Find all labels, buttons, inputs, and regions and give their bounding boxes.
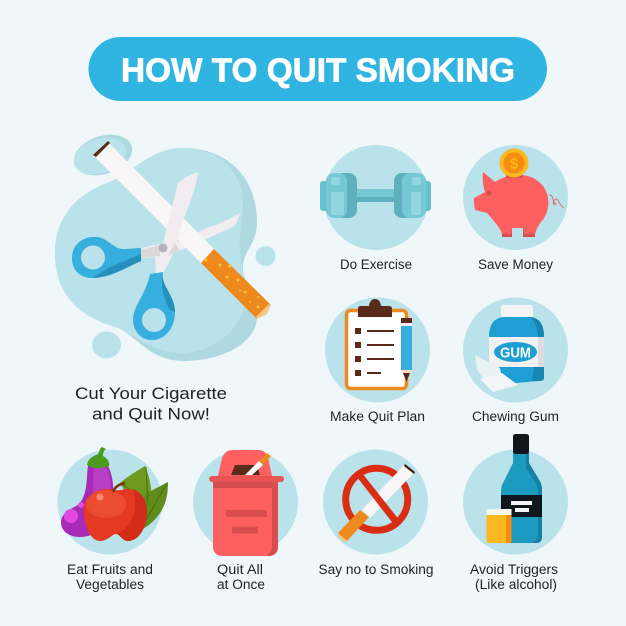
icon: fruits	[61, 447, 168, 541]
icon: clipboard	[346, 299, 412, 388]
label	[217, 562, 265, 592]
panel: say no to smoking	[318, 450, 434, 577]
icon: dumbbell	[320, 173, 431, 218]
icon: pencil	[401, 318, 412, 382]
caption	[75, 384, 227, 424]
label	[67, 562, 153, 592]
label: Vegetables	[76, 577, 144, 592]
label: (Like alcohol)	[475, 577, 557, 592]
leaves	[120, 466, 168, 529]
apple	[84, 483, 147, 541]
label: Make Quit Plan	[330, 409, 425, 424]
label: Chewing Gum	[472, 409, 559, 424]
panel: cut your cigarette	[55, 128, 276, 423]
icon: gum sticks	[475, 355, 518, 392]
label: Eat Fruits and	[67, 562, 153, 577]
label	[470, 562, 558, 592]
icon: trash bin	[209, 450, 284, 556]
eggplant	[61, 447, 113, 537]
label: Say no to Smoking	[318, 562, 434, 577]
caption: and Quit Now!	[92, 404, 210, 424]
label: Save Money	[478, 257, 553, 272]
panel: save money	[463, 145, 568, 272]
label: Do Exercise	[340, 257, 412, 272]
icon: bottle	[486, 434, 542, 543]
panel: chewing gum	[463, 298, 568, 424]
icon: glass	[486, 509, 512, 543]
caption: Cut Your Cigarette	[75, 384, 227, 403]
panel: quit all at once	[193, 450, 298, 592]
icon: scissors upper blade and handles	[72, 172, 198, 340]
label: Avoid Triggers	[470, 562, 558, 577]
panel: avoid triggers	[463, 434, 568, 592]
icon: scissors lower blade	[141, 213, 240, 258]
icon: prohibition cigarette	[338, 464, 415, 542]
label: Quit All	[217, 562, 263, 577]
panel: make quit plan	[325, 298, 430, 424]
title	[88, 37, 547, 101]
panel: do exercise	[320, 145, 431, 272]
label: at Once	[217, 577, 265, 592]
icon: gum bottle: GUM	[500, 344, 531, 362]
icon: coin: $	[510, 156, 519, 172]
blob background	[55, 128, 276, 361]
title: HOW TO QUIT SMOKING	[121, 52, 515, 88]
panel: eat fruits and vegetables	[58, 447, 168, 592]
icon: cigarette	[93, 141, 271, 319]
